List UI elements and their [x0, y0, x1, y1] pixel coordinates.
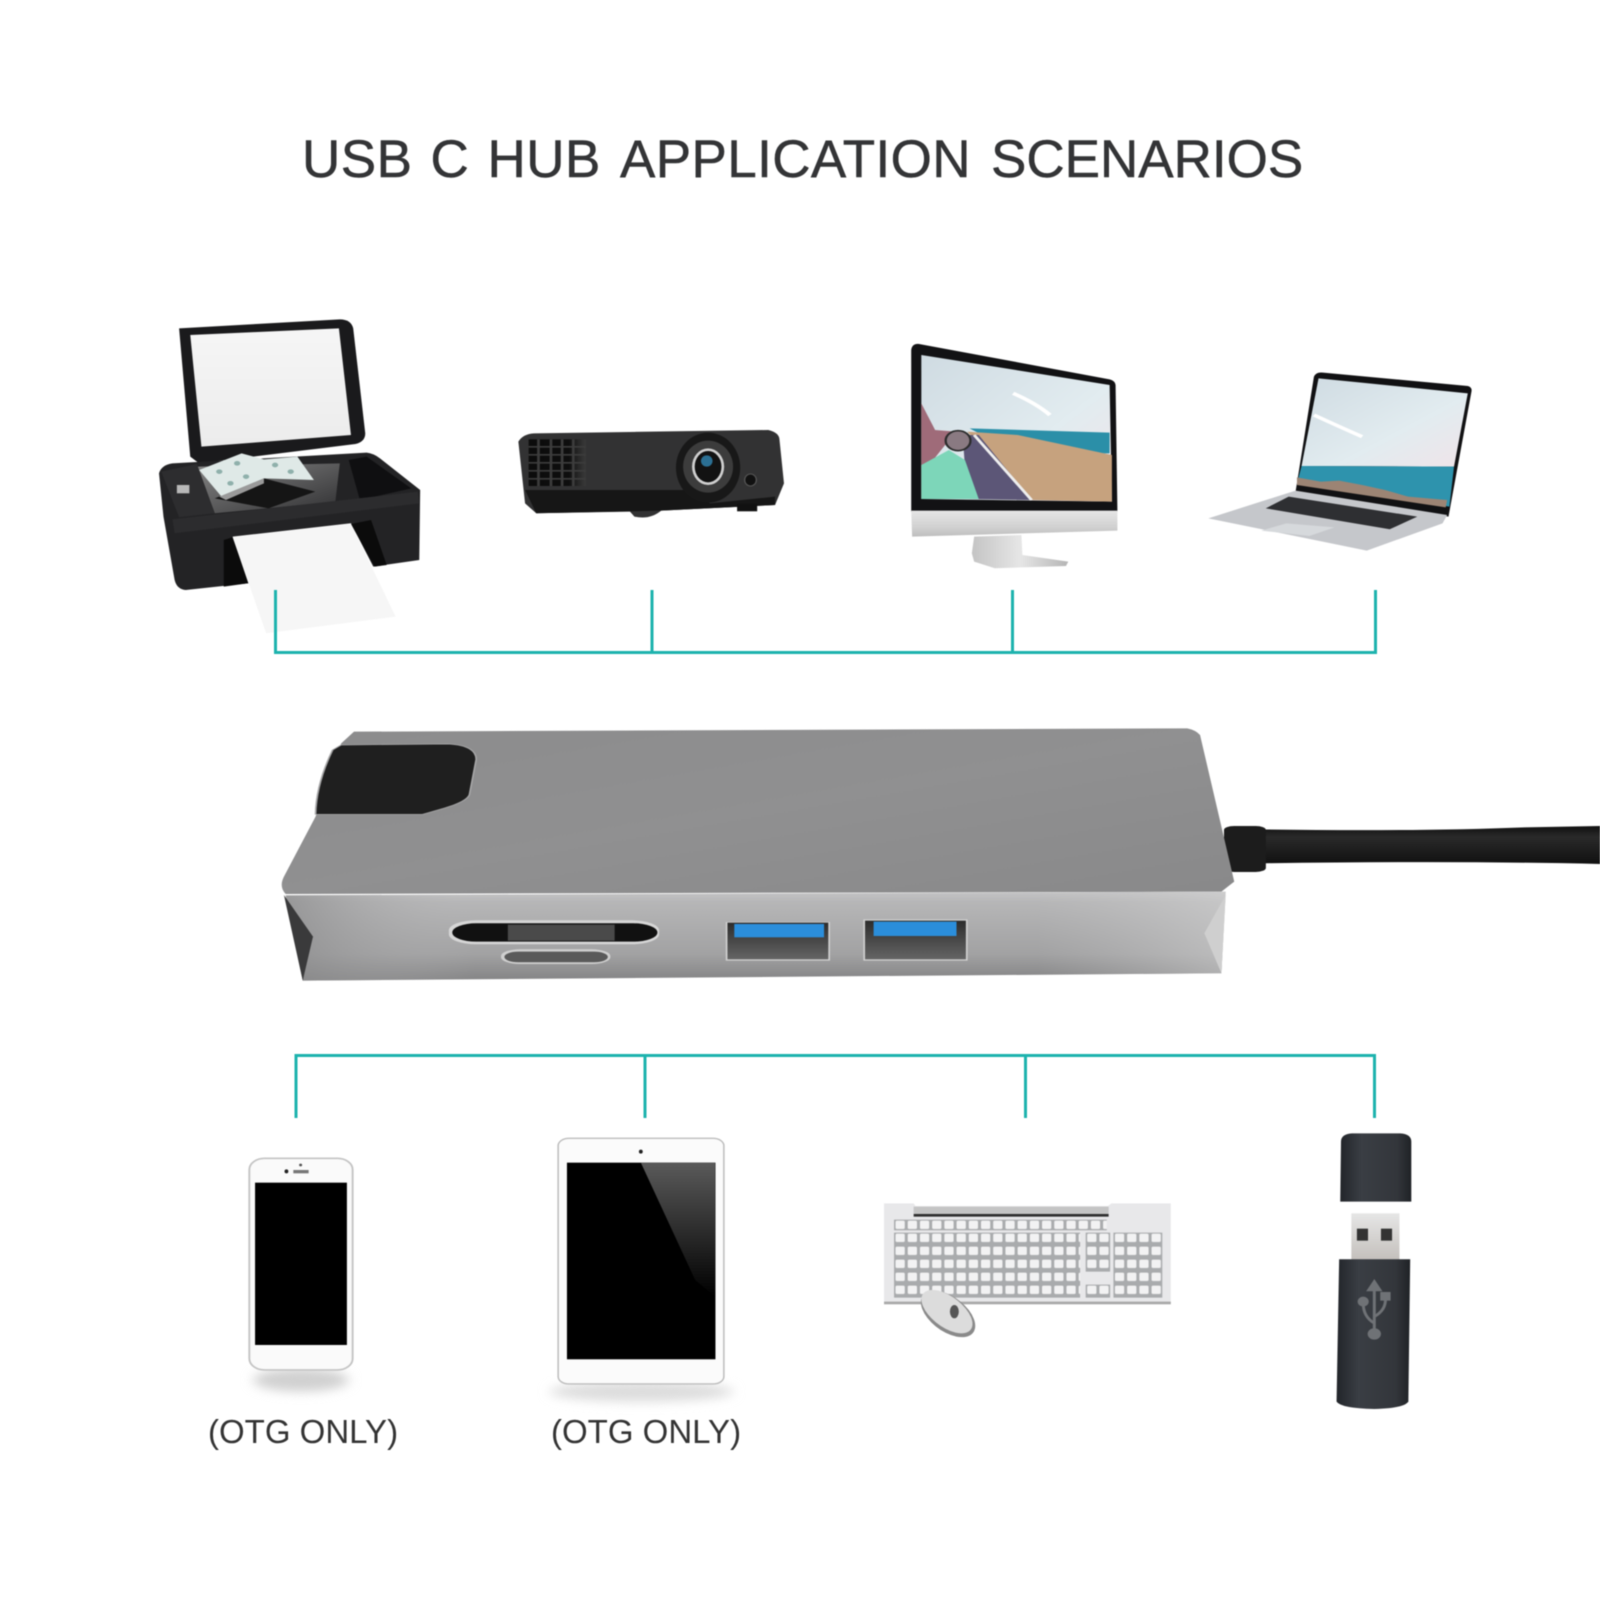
icon: projector — [518, 430, 784, 518]
hub cable — [1224, 826, 1600, 872]
icon: usb flash drive — [1337, 1133, 1411, 1409]
hub front face — [286, 892, 1226, 981]
drive body — [1337, 1259, 1410, 1409]
title: SCENARIOS — [991, 130, 1303, 189]
mouse — [911, 1282, 985, 1346]
title: APPLICATION — [620, 130, 971, 189]
icon: laptop — [1208, 372, 1472, 551]
hub top face — [282, 728, 1234, 894]
card reader slots — [449, 920, 659, 944]
ethernet port block — [316, 744, 476, 814]
printer lid — [179, 319, 365, 463]
drive cap — [1340, 1133, 1411, 1202]
icon: tablet — [550, 1138, 733, 1402]
projector vents — [529, 439, 586, 486]
label: tablet OTG only: (OTG ONLY) — [551, 1413, 741, 1450]
drive connector — [1351, 1213, 1399, 1260]
usb port two — [863, 919, 968, 961]
title: C — [430, 130, 469, 189]
bottom connector lines — [296, 1056, 1374, 1118]
top connector lines — [276, 590, 1376, 652]
usb port one — [726, 922, 830, 961]
icon: smartphone — [249, 1158, 353, 1392]
hub device — [282, 728, 1234, 981]
title: USB — [302, 130, 412, 189]
icon: printer scanner — [159, 319, 420, 633]
usb symbol — [1359, 1282, 1389, 1338]
icon: desktop monitor — [911, 344, 1117, 568]
icon: keyboard and mouse — [884, 1203, 1171, 1346]
title: HUB — [488, 130, 601, 189]
label: phone OTG only: (OTG ONLY) — [208, 1413, 398, 1450]
